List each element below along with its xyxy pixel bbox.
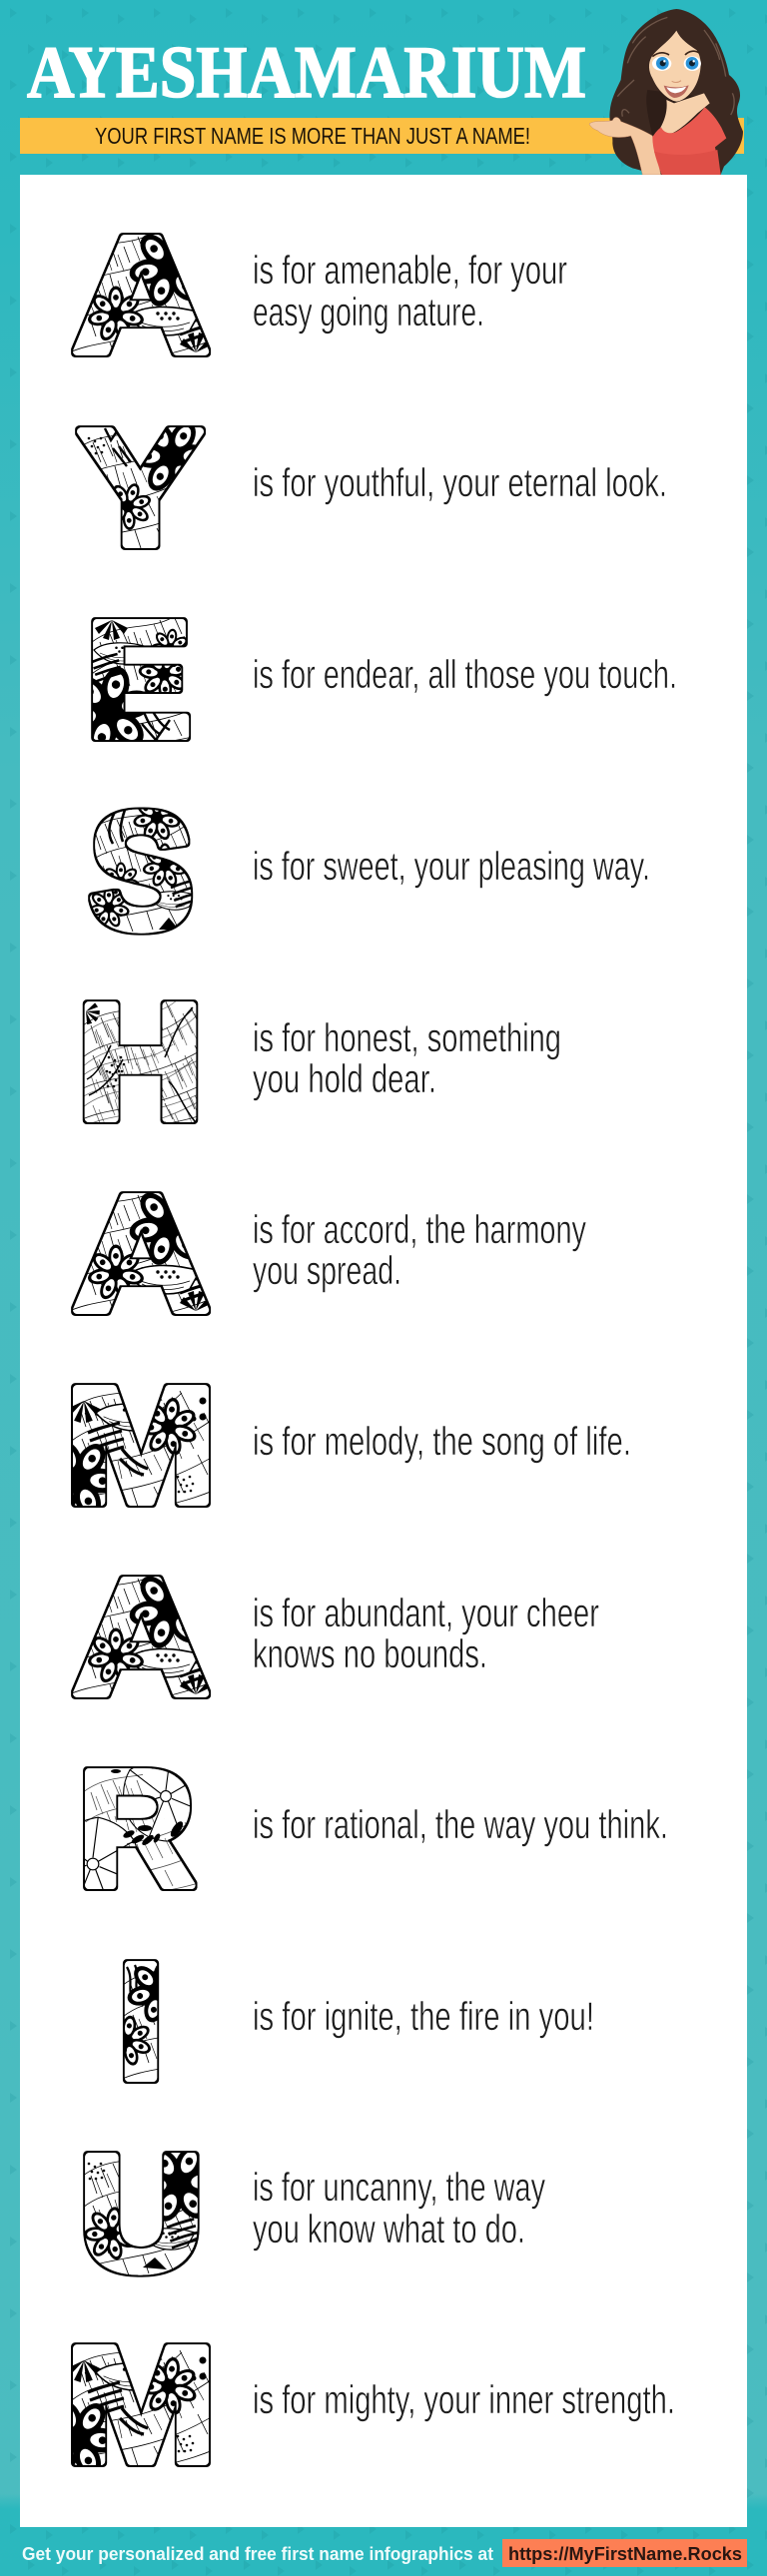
subtitle banner: YOUR FIRST NAME IS MORE THAN JUST A NAME! (95, 123, 530, 149)
line text (253, 1016, 561, 1101)
line text: is for ignite, the fire in you! (253, 1995, 594, 2039)
line text: is for melody, the song of life. (253, 1420, 631, 1464)
row: U uncanny (79, 2122, 545, 2304)
line text: is for accord, the harmony (253, 1208, 586, 1252)
letter I: I (118, 1930, 164, 2113)
line text: is for amenable, for your (253, 249, 567, 293)
letter H: H (77, 970, 204, 1153)
row: E endear (86, 588, 677, 771)
letter A: A (73, 1546, 210, 1728)
letter E: E (86, 588, 191, 771)
footer call to action: Get your personalized and free first name infographics at (22, 2544, 493, 2564)
letter S: S (90, 780, 194, 963)
line text: is for uncanny, the way (253, 2166, 545, 2210)
line text: you know what to do. (253, 2208, 525, 2252)
letter R: R (78, 1737, 195, 1920)
letter A: A (73, 1162, 210, 1345)
row: R rational (78, 1737, 668, 1920)
subtitle banner (20, 118, 744, 154)
row: M mighty (65, 2313, 675, 2496)
line text: you hold dear. (253, 1057, 436, 1101)
title: AYESHAMARIUM (27, 32, 586, 114)
letter M: M (65, 2313, 217, 2496)
line text (253, 1208, 586, 1293)
row: I ignite (118, 1930, 594, 2113)
line text (253, 249, 567, 334)
row: A accord (73, 1162, 586, 1345)
letter M: M (65, 1354, 217, 1537)
footer link badge (502, 2539, 747, 2567)
letter A: A (73, 204, 210, 386)
line text: you spread. (253, 1249, 401, 1293)
row: S sweet (90, 780, 650, 963)
row: H honest (77, 970, 561, 1153)
line text: is for honest, something (253, 1016, 561, 1060)
row: M melody (65, 1354, 631, 1537)
line text: easy going nature. (253, 291, 484, 334)
line text (253, 1592, 599, 1676)
line text (253, 2166, 545, 2252)
line text: knows no bounds. (253, 1632, 487, 1676)
row: A abundant (73, 1546, 599, 1728)
row: A amenable (73, 204, 567, 386)
row: Y youthful (78, 396, 667, 579)
illustration: woman with long brown hair (589, 9, 743, 175)
letter U: U (79, 2122, 204, 2304)
line text: is for abundant, your cheer (253, 1592, 599, 1635)
letter Y: Y (78, 396, 202, 579)
footer link badge: https://MyFirstName.Rocks (508, 2544, 742, 2564)
